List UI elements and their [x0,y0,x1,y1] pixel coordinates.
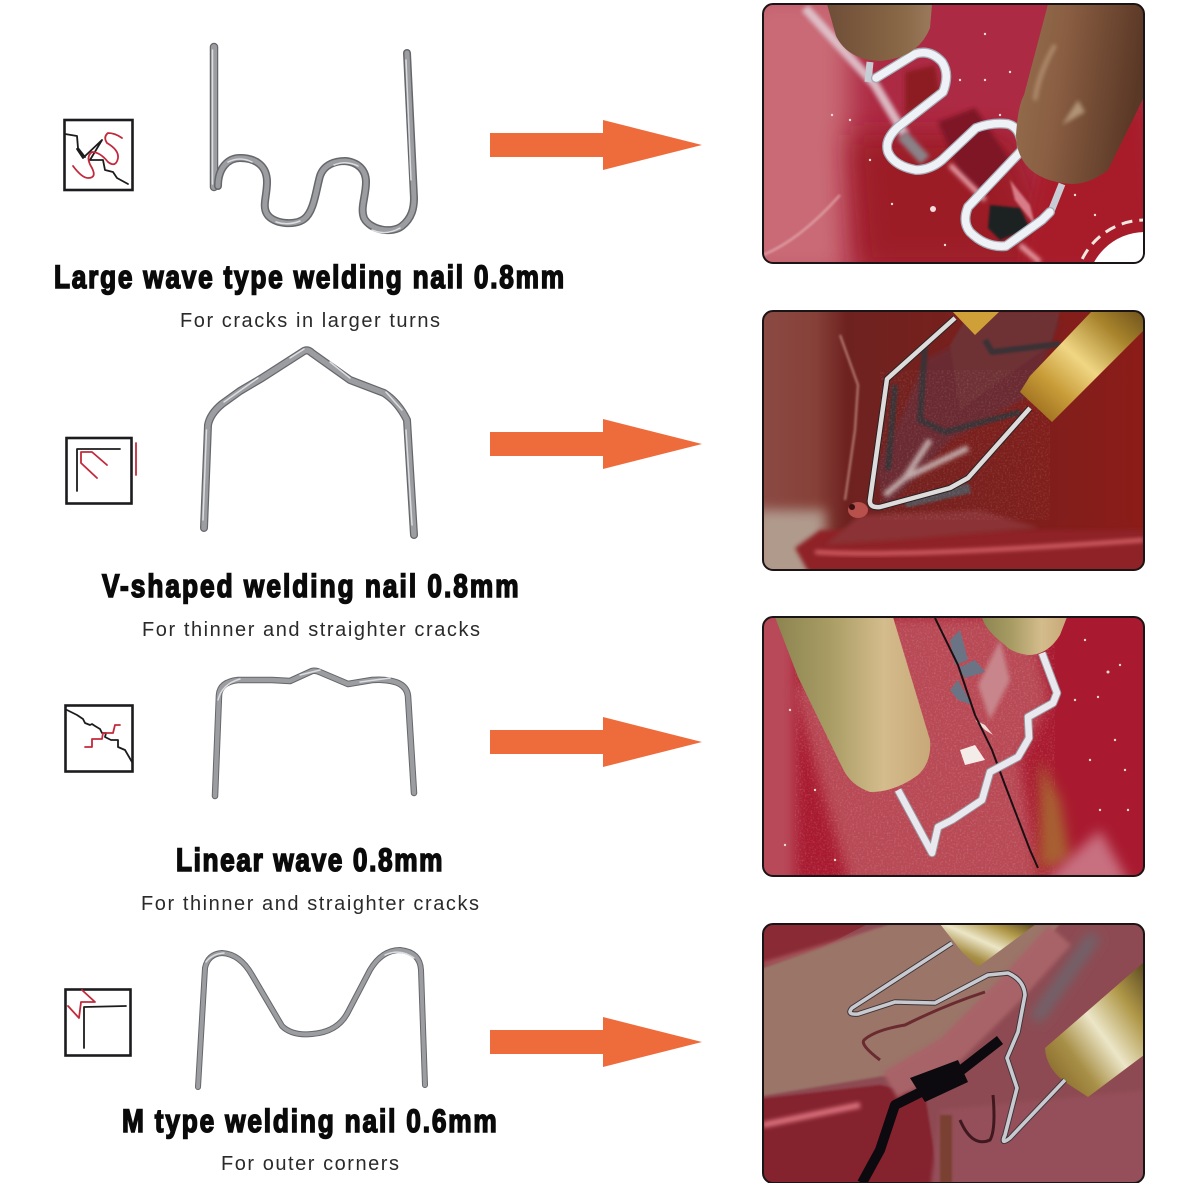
right copper electrode [1016,4,1144,184]
icon: V corner crack diagram [66,438,136,504]
icon: large wave crack diagram [64,120,132,190]
arrow: row 1 [490,120,702,170]
brass electrode top [940,924,1036,967]
photo: V nail on crack [755,311,1150,580]
white linear wave nail [898,653,1057,853]
icon: outer corner diagram [66,990,130,1056]
large beige electrode [775,617,930,792]
nail: V-shaped wire [203,349,414,535]
caption: outer corners: For outer corners [221,1153,399,1175]
white wave nail [868,53,1062,246]
left copper electrode [827,4,932,61]
caption: linear wave use: For thinner and straighter cracks [141,893,479,915]
heading: large wave: Large wave type welding nail 0.8mm [54,261,564,296]
arrow: row 2 [490,419,702,469]
row 1: large wave nail [54,0,1200,360]
arrow: row 3 [490,717,702,767]
photo: large wave nail on crack [762,3,1145,264]
arrow: row 4 [490,1017,702,1067]
heading: M type: M type welding nail 0.6mm [122,1105,497,1140]
brass electrode right [1020,311,1144,422]
nail: linear wave wire [215,670,414,796]
weld seam [890,935,1060,1085]
row 3: linear wave nail [66,610,1144,915]
row 2: V-shaped nail [66,311,1150,641]
small beige electrode [982,617,1067,655]
silver V nail [870,318,1030,507]
brass electrode top [952,311,1000,335]
heading: V-shaped: V-shaped welding nail 0.8mm [102,570,519,605]
nail: large wave wire [212,47,414,233]
brass electrode right [1045,962,1144,1097]
caption: larger turns: For cracks in larger turns [180,310,440,332]
caption: V-shaped use: For thinner and straighter cracks [142,619,480,641]
silver M nail [850,943,1065,1141]
heading: linear wave: Linear wave 0.8mm [176,844,442,879]
photo: linear wave nail on crack [750,610,1144,890]
icon: linear crack diagram [66,706,132,772]
hairline crack [935,618,1038,868]
black tar crack [862,1040,1000,1183]
nail: M type wire [198,950,425,1087]
photo: M nail on outer corner [750,915,1150,1183]
corner marking [1094,232,1143,262]
row 4: M type nail [66,915,1150,1183]
